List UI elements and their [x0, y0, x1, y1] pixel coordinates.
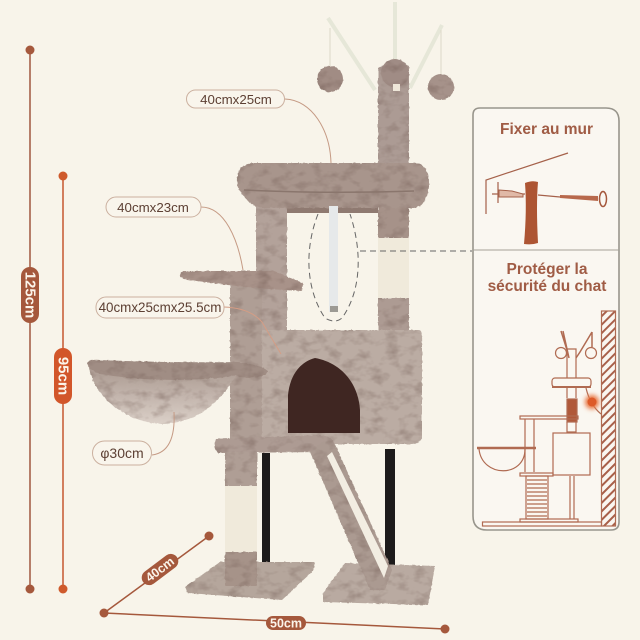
- cat tree product: [87, 2, 454, 605]
- top post: [378, 62, 409, 166]
- dimension: width 50cm: 50cm: [270, 616, 302, 630]
- callout: 40cmx25cmx25.5cm: 40cmx25cmx25.5cm: [99, 300, 221, 315]
- lower platform: [520, 473, 553, 476]
- mid platform: [520, 416, 578, 419]
- dimension: height 95cm: [54, 172, 72, 594]
- callout: diameter 30cm: φ30cm: [100, 445, 144, 461]
- hammock rim: [87, 360, 268, 380]
- tether: [586, 388, 601, 414]
- hammock bowl: [89, 368, 238, 424]
- dimension: height 95cm: 95cm: [54, 357, 72, 395]
- dimension: depth 40cm: 40cm: [143, 554, 177, 585]
- toy strings and balls: [317, 28, 454, 100]
- callout: diameter 30cm: [92, 412, 174, 465]
- hanging toy strip: [329, 206, 338, 312]
- callout: 40cmx25cm: 40cmx25cm: [200, 92, 272, 107]
- sisal highlight: [567, 399, 577, 422]
- callout: 40cmx23cm: [106, 197, 243, 270]
- base left: [185, 562, 315, 600]
- house: [262, 330, 422, 444]
- diagram: cat tree fixed to wall: [477, 311, 616, 526]
- icon: fixing point highlight: [585, 395, 599, 409]
- black legs: [262, 453, 270, 562]
- base right: [323, 563, 435, 605]
- toy rods: [328, 2, 442, 90]
- heading: Fixer au mur: Fixer au mur: [500, 121, 593, 138]
- dimension: total height 125cm: 125cm: [22, 272, 38, 318]
- right post: [378, 205, 409, 238]
- middle post: [256, 205, 287, 333]
- heading: Protéger la sécurité du chat: sécurité du chat: [488, 278, 606, 295]
- floor: [482, 522, 602, 526]
- ramp / scratching: [526, 476, 548, 519]
- callout: 40cmx23cm: 40cmx23cm: [117, 200, 189, 215]
- house entrance: [288, 358, 360, 433]
- lower post with sisal: [225, 452, 257, 486]
- dashed highlight: hanging toy: [309, 214, 472, 321]
- bowl: [477, 447, 536, 449]
- toys: [556, 348, 566, 358]
- left post: [230, 285, 262, 440]
- top platform: [237, 163, 429, 208]
- dimension: width 50cm: [100, 608, 450, 634]
- panel: wall fixing and safety: [473, 108, 619, 530]
- post: [567, 349, 576, 432]
- underside strip: [287, 205, 378, 213]
- wall: [602, 311, 616, 526]
- dimension: depth 40cm: [104, 532, 214, 613]
- dimension: total height 125cm: [21, 46, 39, 594]
- callout: 40cmx25cmx25.5cm: [96, 297, 281, 354]
- house: [553, 433, 590, 475]
- small platform: [180, 271, 303, 291]
- panel frame: [473, 108, 619, 530]
- icon: screw and wall anchor: [486, 153, 606, 244]
- heading: Protéger la sécurité du chat: Protéger la: [507, 261, 588, 278]
- callout: 40cmx25cm: [186, 90, 331, 163]
- top platform: [552, 378, 591, 387]
- ramp: [310, 440, 392, 590]
- lower platform: [214, 435, 334, 453]
